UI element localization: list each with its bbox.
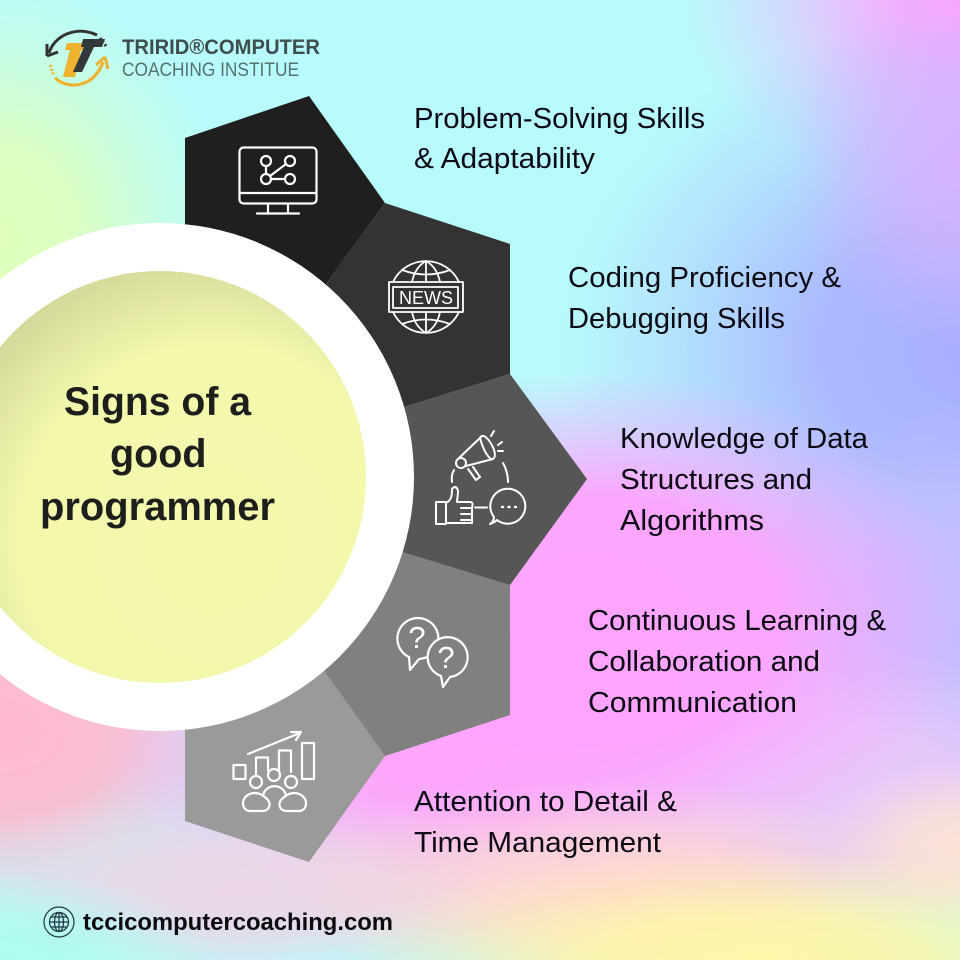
segment 3 xyxy=(340,374,587,585)
icon: question bubbles xyxy=(397,618,468,687)
footer website xyxy=(44,907,393,937)
label: data structures xyxy=(620,423,869,537)
label: attention to detail: Attention to Detail & xyxy=(414,786,677,818)
logo subtitle: COACHING INSTITUE xyxy=(122,59,299,81)
label: coding proficiency: Coding Proficiency & xyxy=(568,262,841,294)
website address: tccicomputercoaching.com xyxy=(83,909,393,936)
central circle xyxy=(0,223,414,731)
label: problem-solving xyxy=(414,103,705,175)
segment 1 xyxy=(185,96,385,320)
logo name: TRIRID®COMPUTER xyxy=(122,36,320,59)
label: data structures: Algorithms xyxy=(620,505,764,537)
label: coding proficiency xyxy=(568,262,841,335)
label: coding proficiency: Debugging Skills xyxy=(568,303,785,335)
segment 4 xyxy=(300,533,510,756)
label: problem-solving: Problem-Solving Skills xyxy=(414,103,705,135)
logo mark xyxy=(47,31,108,85)
yellow disc xyxy=(0,271,366,683)
label: data structures: Knowledge of Data xyxy=(620,423,869,455)
hexagon ring segments xyxy=(185,96,587,862)
icon: news globe: NEWS xyxy=(399,288,453,308)
white ring xyxy=(0,223,414,731)
label: continuous learning xyxy=(588,605,886,719)
icon: monitor with nodes xyxy=(240,148,316,214)
icon: globe xyxy=(44,907,74,937)
label: attention to detail: Time Management xyxy=(414,827,661,859)
segment 5 xyxy=(185,637,385,862)
title: programmer xyxy=(40,485,275,529)
label: data structures: Structures and xyxy=(620,464,812,496)
icon: question bubbles: ? xyxy=(437,640,455,675)
segment 2 xyxy=(300,203,510,427)
label: continuous learning: Continuous Learning & xyxy=(588,605,886,637)
icon: growth chart and team xyxy=(234,732,314,811)
title: good xyxy=(110,432,207,476)
label: problem-solving: & Adaptability xyxy=(414,143,596,175)
title: Signs of a xyxy=(64,380,252,424)
label: continuous learning: Collaboration and xyxy=(588,646,820,678)
icon: megaphone, like and chat xyxy=(436,431,525,524)
icon: question bubbles: ? xyxy=(408,620,426,655)
icon: news globe xyxy=(389,261,463,333)
label: attention to detail xyxy=(414,786,677,859)
label: continuous learning: Communication xyxy=(588,687,797,719)
logo xyxy=(47,31,320,85)
